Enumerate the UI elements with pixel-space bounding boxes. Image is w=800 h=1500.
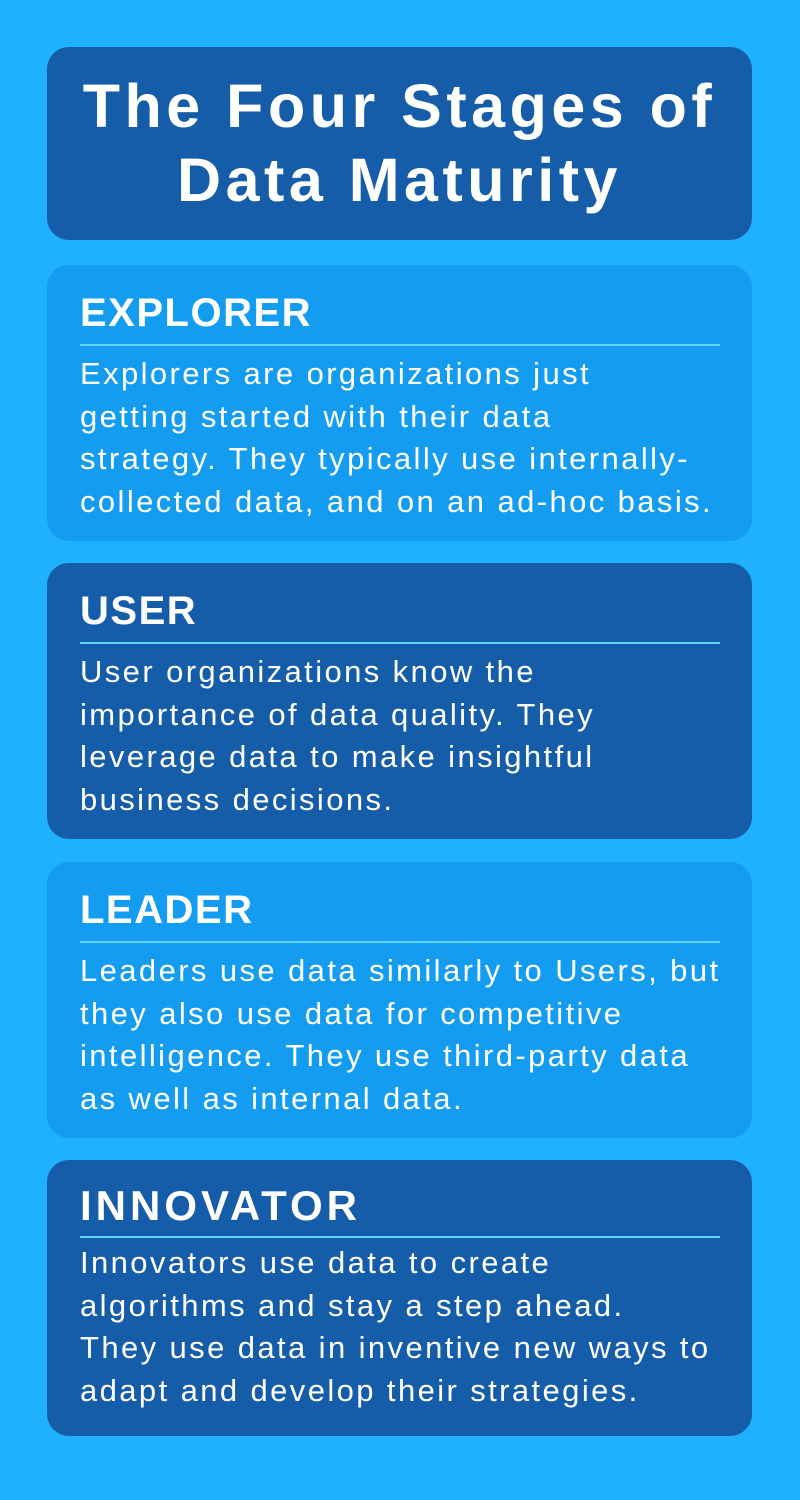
text: leader description: as well as internal data. — [80, 1081, 464, 1116]
panel: user — [47, 563, 752, 839]
text: leader description: Leaders use data similarly to Users, but — [80, 953, 720, 988]
text: explorer description: strategy. They typically use internally- — [80, 441, 690, 476]
text: user description: business decisions. — [80, 782, 394, 817]
title: Data Maturity — [177, 146, 622, 214]
text: leader description: intelligence. They use third-party data — [80, 1038, 690, 1073]
text: explorer description — [80, 356, 713, 519]
text: innovator description: Innovators use data to create — [80, 1245, 551, 1280]
heading: user: USER — [80, 589, 197, 633]
text: innovator description — [80, 1245, 711, 1408]
text: leader description — [80, 953, 720, 1116]
panel: leader — [47, 862, 752, 1138]
title: The Four Stages of — [83, 72, 716, 140]
text: innovator description: algorithms and stay a step ahead. — [80, 1288, 624, 1323]
text: explorer description: Explorers are organizations just — [80, 356, 591, 391]
heading: leader: LEADER — [80, 888, 253, 932]
text: leader description: they also use data for competitive — [80, 996, 623, 1031]
panel: explorer — [47, 265, 752, 541]
panel: innovator — [47, 1160, 752, 1436]
text: innovator description: They use data in inventive new ways to — [80, 1330, 711, 1365]
text: user description — [80, 654, 595, 817]
text: user description: leverage data to make insightful — [80, 739, 595, 774]
heading: innovator: INNOVATOR — [80, 1182, 361, 1229]
text: explorer description: collected data, and on an ad-hoc basis. — [80, 484, 713, 519]
text: user description: importance of data quality. They — [80, 697, 595, 732]
text: innovator description: adapt and develop their strategies. — [80, 1373, 640, 1408]
title — [47, 47, 752, 240]
text: user description: User organizations know the — [80, 654, 536, 689]
heading: explorer: EXPLORER — [80, 291, 312, 335]
text: explorer description: getting started with their data — [80, 399, 552, 434]
